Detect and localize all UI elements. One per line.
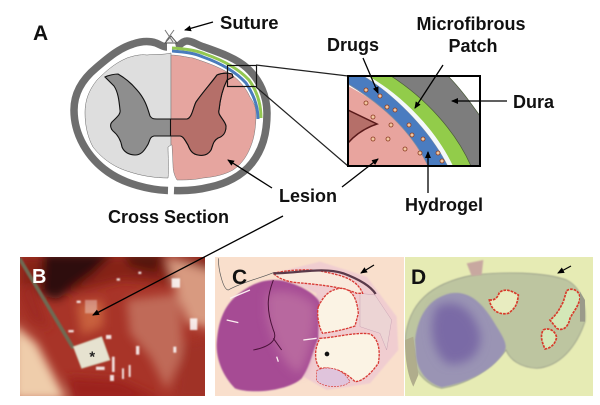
right side fibrous tissue xyxy=(360,293,392,350)
gray matter xyxy=(105,73,233,155)
cavity 2 xyxy=(550,289,580,329)
dark spot xyxy=(325,352,329,356)
arrow: D membrane xyxy=(558,266,571,273)
arrow: C membrane xyxy=(361,265,374,273)
right dark tissue edge xyxy=(580,292,585,322)
label: Microfibrous Patch: Patch xyxy=(448,36,498,56)
label: Hydrogel: Hydrogel xyxy=(405,195,483,215)
cavity 3 xyxy=(542,329,557,349)
label: Lesion: Lesion xyxy=(279,186,337,206)
forceps xyxy=(19,258,73,348)
hydrogel band xyxy=(172,51,258,119)
arrow: lesion to inset xyxy=(342,159,378,187)
patch layer xyxy=(368,76,471,166)
lesion tissue xyxy=(348,86,429,166)
panel: photo B xyxy=(20,257,205,396)
label: D: D xyxy=(411,266,426,289)
membrane outline xyxy=(218,258,273,290)
dark membrane xyxy=(273,270,376,294)
arrow: lesion to photo B xyxy=(93,216,283,315)
label: C: C xyxy=(232,266,247,289)
zoom lines xyxy=(256,65,348,166)
gray matter tip xyxy=(348,110,377,143)
arrow: dura xyxy=(452,100,507,102)
panel label A: A xyxy=(33,22,48,45)
cavity 1 xyxy=(489,290,518,314)
dura ring xyxy=(74,41,267,191)
panel: spinal cord cross section xyxy=(74,30,267,191)
dura layer xyxy=(391,76,480,166)
panel: magnified inset xyxy=(348,76,480,166)
label: B: B xyxy=(32,266,46,288)
magnified region box xyxy=(228,66,256,86)
surrounding fibrous tissue xyxy=(405,273,585,388)
top tissue fragment xyxy=(467,260,483,276)
arrow: patch xyxy=(415,65,443,108)
microfibrous patch band xyxy=(172,48,261,118)
label: Microfibrous Patch: Microfibrous xyxy=(416,14,526,34)
label: Microfibrous Patch xyxy=(416,14,526,56)
upper cavity xyxy=(273,270,363,293)
middle cavity xyxy=(318,288,358,333)
label: Cross Section: Cross Section xyxy=(108,207,229,227)
arrow: suture xyxy=(185,22,213,30)
lower cavity xyxy=(316,333,379,382)
panel: histology C xyxy=(215,257,404,396)
midline fissure xyxy=(253,280,282,350)
surrounding scar tissue xyxy=(273,262,398,390)
cord left half xyxy=(85,53,171,178)
bottom tissue fragment xyxy=(317,368,350,387)
cord tissue xyxy=(217,280,320,391)
gray matter lesion overlay xyxy=(170,73,233,155)
label: Drugs: Drugs xyxy=(327,35,379,55)
implanted patch xyxy=(73,337,110,368)
suture knot xyxy=(165,30,177,43)
asterisk: * xyxy=(89,350,95,366)
label: Suture: Suture xyxy=(220,12,279,33)
white gap xyxy=(364,76,453,166)
arrow: hydrogel xyxy=(427,152,429,193)
label: Dura: Dura xyxy=(513,92,555,112)
arrow: drugs xyxy=(363,58,378,93)
specular highlights xyxy=(68,272,197,381)
drug particles xyxy=(364,88,444,163)
cord right half lesion xyxy=(171,55,256,180)
cord tissue xyxy=(415,293,506,387)
panel: histology D xyxy=(405,257,593,396)
hydrogel layer xyxy=(348,76,448,166)
arrow: lesion to cross section xyxy=(228,160,272,188)
